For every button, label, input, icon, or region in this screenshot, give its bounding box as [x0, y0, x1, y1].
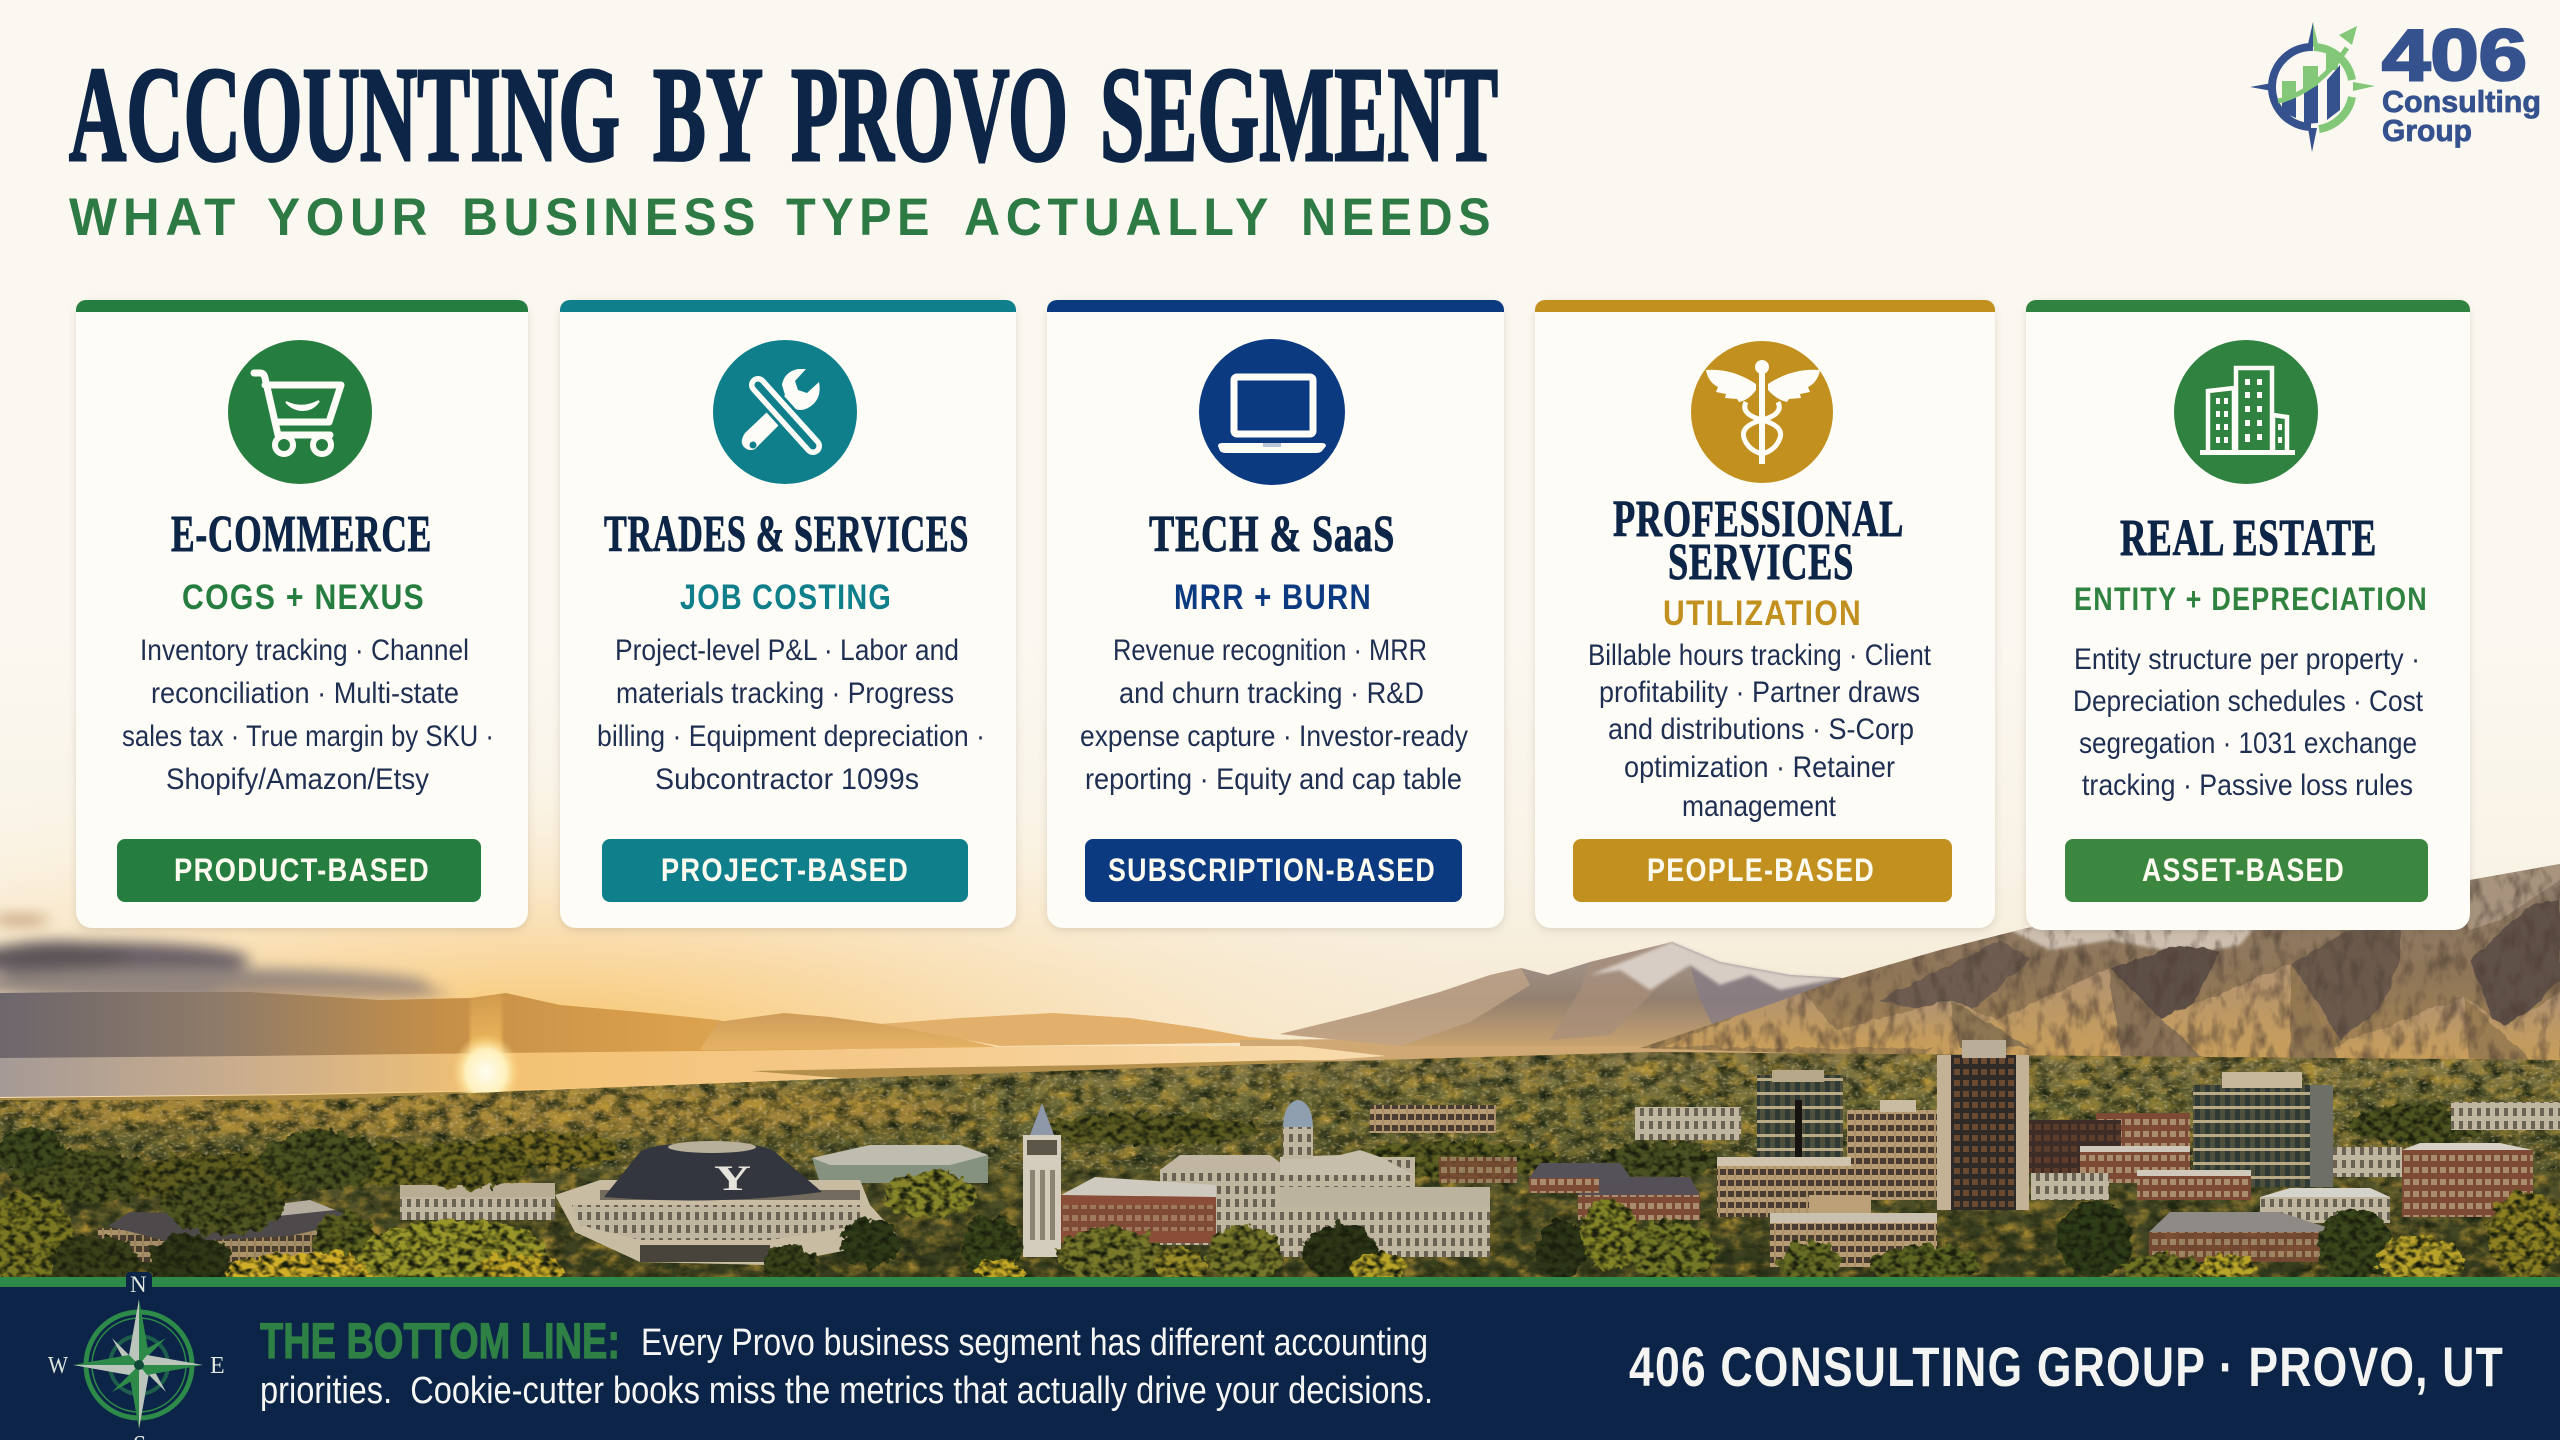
description: Project-level P&L · Labor and	[615, 634, 959, 667]
pill: subscription-based: SUBSCRIPTION-BASED	[1108, 852, 1436, 888]
icon: office buildings	[2174, 340, 2318, 484]
panel: Trades & Services card	[560, 300, 1016, 928]
mountain spurs	[1664, 900, 2560, 1064]
sunset glow	[0, 700, 2560, 1300]
near shore strip	[0, 1086, 800, 1135]
bell tower	[1023, 1103, 1061, 1257]
heading: E-COMMERCE	[171, 506, 432, 563]
focus label: COGS + NEXUS	[182, 578, 425, 617]
description: and distributions · S-Corp	[1608, 713, 1914, 746]
bottom line callout: Every Provo business segment has different accounting	[641, 1322, 1428, 1364]
foreground trees	[0, 1128, 2560, 1295]
bottom line callout: priorities. Cookie-cutter books miss the metrics that actually drive your decisions.	[260, 1370, 1433, 1412]
bottom line callout	[260, 1313, 1433, 1412]
description: reconciliation · Multi-state	[151, 677, 459, 710]
icon: compass rose: N	[130, 1272, 147, 1297]
near range	[1640, 860, 2560, 1070]
snow band	[2011, 928, 2255, 952]
teal library building	[812, 1145, 988, 1183]
focus label: MRR + BURN	[1174, 578, 1372, 617]
panel: Tech & SaaS card	[1047, 300, 1504, 928]
icon: shopping cart	[228, 340, 372, 484]
logo: 406 Consulting Group	[2250, 16, 2541, 152]
title: ACCOUNTING	[69, 40, 620, 190]
description: Subcontractor 1099s	[655, 763, 919, 796]
subtitle	[69, 188, 1496, 247]
photo: Provo valley panorama	[0, 817, 2560, 1277]
bottom line callout: THE BOTTOM LINE:	[260, 1313, 620, 1369]
small stone buildings	[400, 1183, 555, 1220]
description	[1080, 634, 1468, 796]
icon: laptop	[1199, 339, 1345, 485]
subtitle: NEEDS	[1301, 188, 1496, 247]
description	[1588, 639, 1932, 823]
heading: REAL ESTATE	[2120, 510, 2377, 567]
description: management	[1682, 790, 1837, 823]
stadium with Y dome	[555, 1141, 897, 1265]
pill: people-based	[1573, 839, 1952, 902]
subtitle: ACTUALLY	[964, 188, 1274, 247]
valley haze at mountain base	[1240, 1036, 1900, 1070]
description: segregation · 1031 exchange	[2079, 727, 2417, 760]
focus label: JOB COSTING	[680, 578, 892, 617]
description: billing · Equipment depreciation ·	[597, 720, 985, 753]
clouds	[0, 915, 450, 1002]
right far peaks	[1280, 942, 1843, 1046]
dome	[1283, 1125, 1313, 1159]
description: optimization · Retainer	[1624, 751, 1895, 784]
capitol style building	[1061, 1100, 1490, 1257]
heading: SERVICES	[1668, 534, 1854, 591]
description: Revenue recognition · MRR	[1113, 634, 1427, 667]
left roof building	[98, 1200, 360, 1262]
focus label: UTILIZATION	[1663, 594, 1862, 633]
subtitle: WHAT	[69, 188, 241, 247]
description	[122, 634, 494, 796]
left mountains	[0, 992, 880, 1060]
icon: compass rose: E	[210, 1353, 225, 1379]
pill: project-based	[602, 839, 968, 902]
title: BY	[653, 40, 763, 190]
description: Depreciation schedules · Cost	[2073, 685, 2424, 718]
pill: product-based	[117, 839, 481, 902]
logo: 406 Consulting Group: Group	[2382, 113, 2472, 148]
description: profitability · Partner draws	[1599, 676, 1920, 709]
heading	[1613, 491, 1904, 591]
footer band	[0, 1272, 2560, 1440]
description: Entity structure per property ·	[2074, 643, 2420, 676]
icon: compass rose: W	[48, 1353, 68, 1379]
heading: PROFESSIONAL	[1613, 491, 1904, 548]
icon: compass rose	[48, 1272, 225, 1440]
pill: project-based: PROJECT-BASED	[661, 852, 909, 888]
logo text: 406	[2382, 16, 2527, 96]
logo compass mark	[2250, 22, 2375, 152]
heading: TRADES & SERVICES	[604, 506, 969, 563]
title: PROVO	[791, 40, 1068, 190]
panel: E-Commerce card	[76, 300, 528, 928]
subtitle: BUSINESS	[462, 188, 761, 247]
snow caps	[1590, 942, 1840, 990]
icon: crossed tools	[713, 340, 857, 484]
pill: product-based: PRODUCT-BASED	[174, 852, 430, 888]
focus label: ENTITY + DEPRECIATION	[2074, 581, 2428, 617]
pill: asset-based	[2065, 839, 2428, 902]
heading: TECH & SaaS	[1149, 506, 1395, 563]
description: reporting · Equity and cap table	[1085, 763, 1462, 796]
description: materials tracking · Progress	[616, 677, 954, 710]
description	[597, 634, 985, 796]
panel: Real Estate card	[2026, 300, 2470, 930]
pill: subscription-based	[1085, 839, 1462, 902]
logo: 406 Consulting Group: Consulting	[2382, 84, 2541, 119]
description: sales tax · True margin by SKU ·	[122, 720, 494, 753]
far shore wedge	[751, 1060, 1400, 1085]
subtitle: YOUR	[267, 188, 433, 247]
description: Inventory tracking · Channel	[140, 634, 469, 667]
city and forest base	[0, 1045, 2560, 1280]
description: and churn tracking · R&D	[1119, 677, 1424, 710]
title	[69, 40, 1498, 190]
sun	[452, 1034, 520, 1110]
pill: asset-based: ASSET-BASED	[2142, 852, 2345, 888]
description: Billable hours tracking · Client	[1588, 639, 1932, 672]
downtown buildings	[1370, 1040, 2560, 1267]
description: Shopify/Amazon/Etsy	[166, 763, 429, 796]
subtitle: TYPE	[786, 188, 935, 247]
description: tracking · Passive loss rules	[2082, 769, 2413, 802]
stadium letter Y: Y	[714, 1158, 751, 1198]
panel: Professional Services card	[1535, 300, 1995, 928]
sun reflection	[470, 980, 502, 1150]
description: expense capture · Investor-ready	[1080, 720, 1468, 753]
pill: people-based: PEOPLE-BASED	[1647, 852, 1875, 888]
far field trees	[10, 1105, 2490, 1206]
title: SEGMENT	[1100, 40, 1498, 190]
lake	[0, 1046, 1386, 1097]
icon: caduceus	[1691, 341, 1833, 483]
description	[2073, 643, 2424, 802]
